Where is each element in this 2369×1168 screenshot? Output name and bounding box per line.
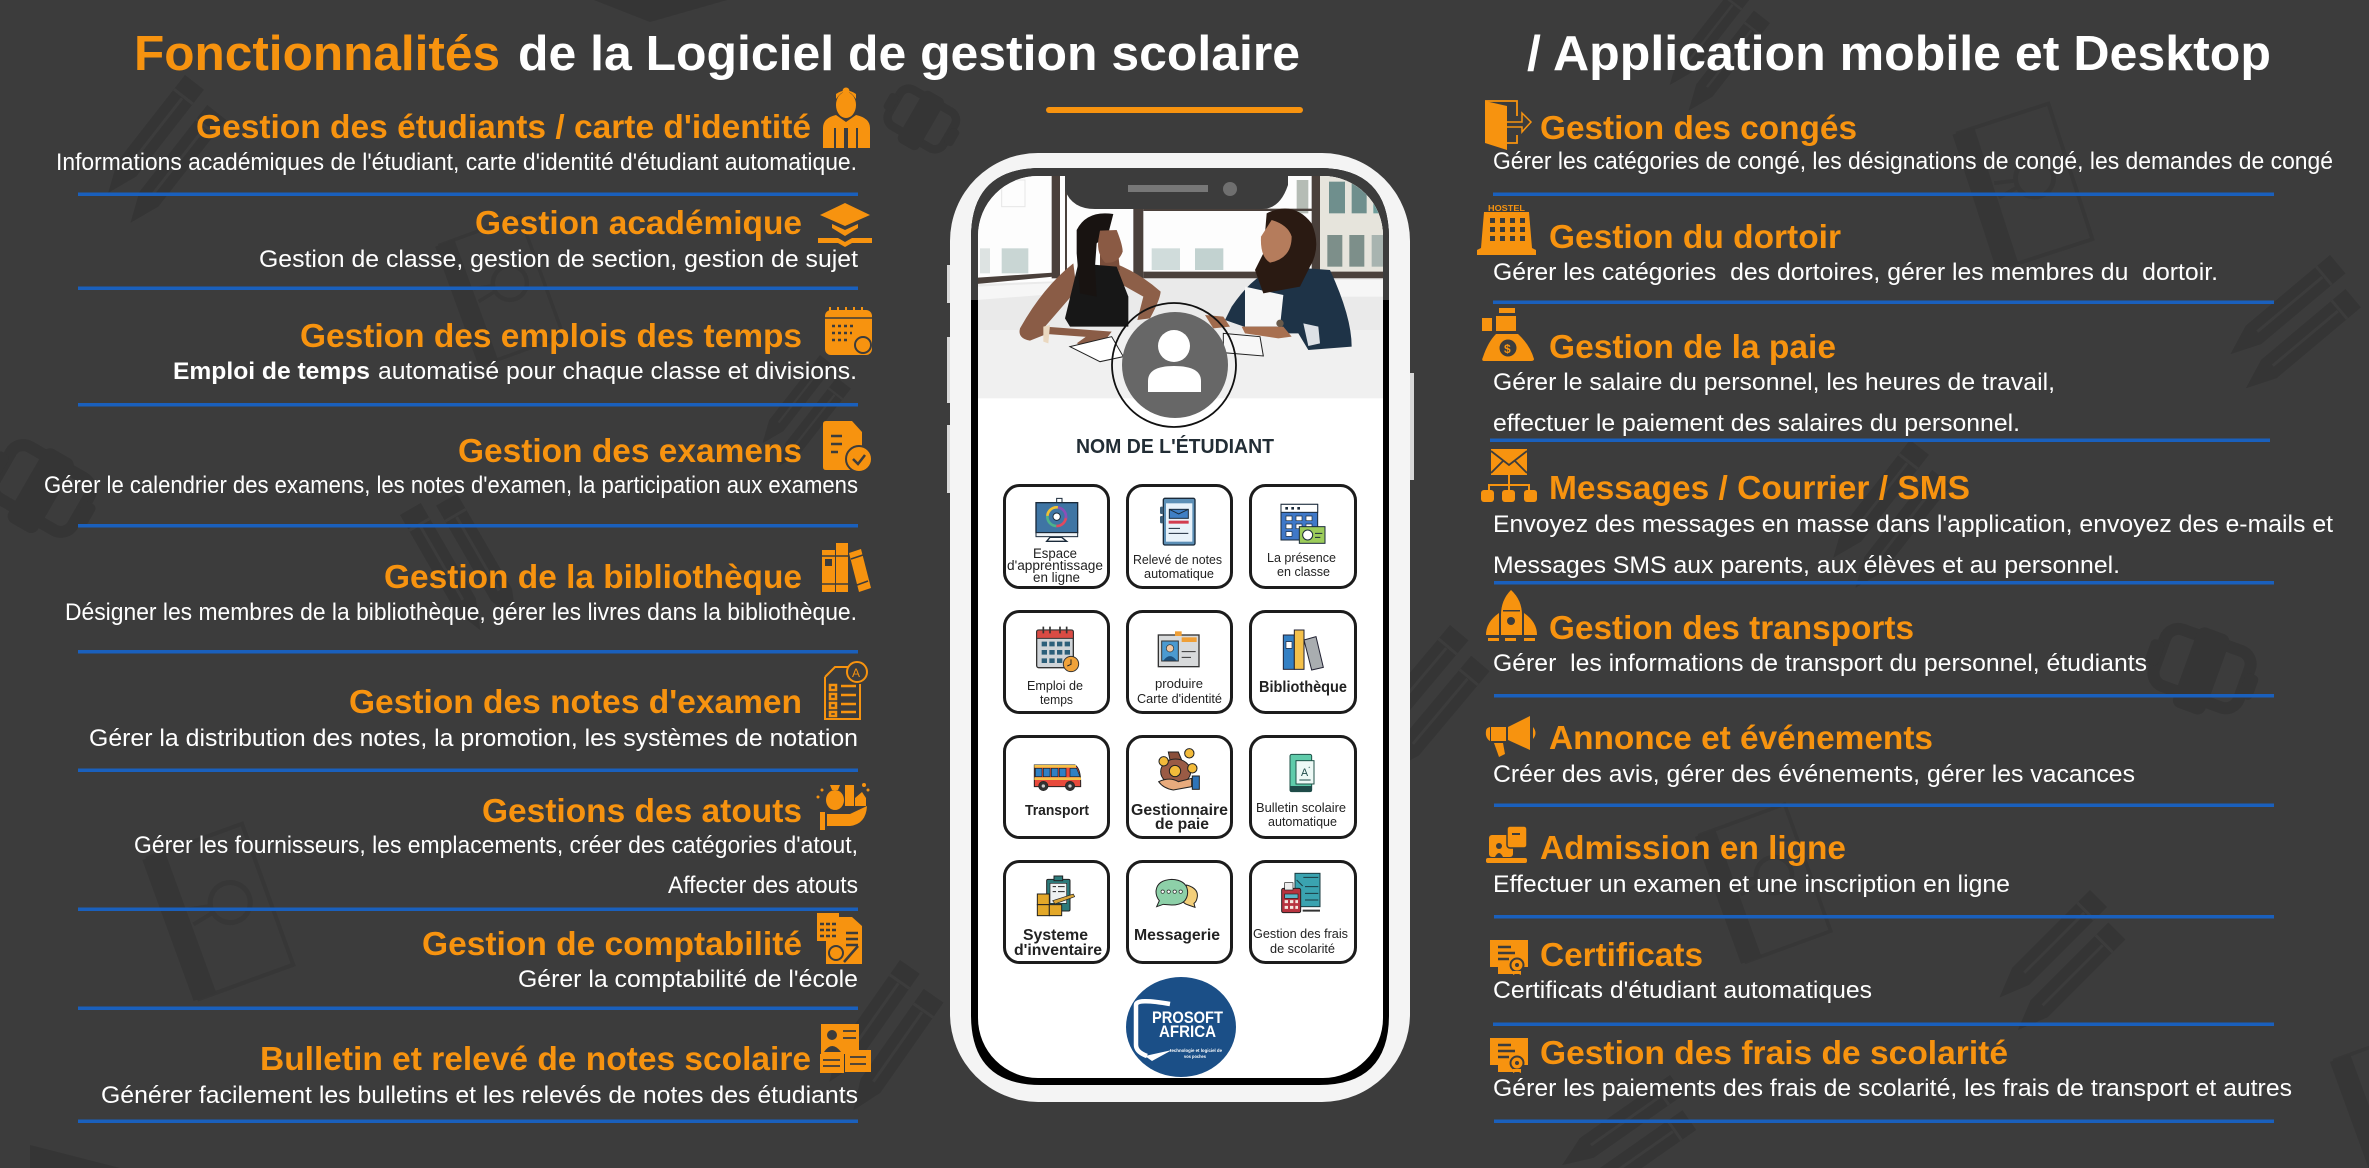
card: La présence en classe: La présence <box>1267 551 1336 565</box>
phone outer frame <box>950 153 1410 1102</box>
icon: fee documents <box>1282 873 1320 913</box>
icon: phone report card: * <box>1308 765 1310 770</box>
window frames <box>977 175 1383 284</box>
card: Bibliothèque <box>1250 612 1356 712</box>
item: Bulletin et relevé de notes scolaire: Bulletin et relevé de notes scolaire <box>260 1041 811 1078</box>
item: Gestion de comptabilité <box>78 913 862 1010</box>
icon: phone report <box>1160 498 1195 545</box>
icon: rocket <box>1486 590 1537 641</box>
icon: money bag in hand <box>1159 749 1199 790</box>
phone notch <box>1065 176 1288 209</box>
icon: hostel building <box>1477 204 1536 255</box>
card: Relevé de notes: automatique <box>1144 567 1214 581</box>
icon: bus <box>1034 765 1081 791</box>
icon: money bag: $ <box>1504 342 1511 356</box>
logo: Prosoft Africa: vos poches <box>1184 1054 1206 1059</box>
photo: two women at a table <box>977 175 1383 398</box>
phone bezel <box>971 168 1389 1085</box>
item: Gestion du dortoir: Gestion du dortoir <box>1549 219 1841 256</box>
logo: Prosoft Africa: AFRICA <box>1159 1023 1216 1041</box>
item: Gestion de comptabilité: Gérer la comptabilité de l'école <box>518 966 858 993</box>
item: Gestion des notes d'examen: Gestion des notes d'examen <box>349 684 802 721</box>
item: Gestions des atouts: Gestions des atouts <box>482 793 802 830</box>
card: Espace d'apprentissage: en ligne <box>1033 570 1080 585</box>
item: Bulletin et relevé de notes scolaire: Générer facilement les bulletins et les relevés de notes des étudiants <box>101 1082 858 1109</box>
panel: right feature list <box>1477 101 2333 1123</box>
item: Gestion académique: Gestion de classe, gestion de section, gestion de sujet <box>259 246 858 273</box>
title: main heading left <box>134 26 1300 81</box>
card: Systeme d'inventaire <box>1004 862 1108 962</box>
item: Gestion des étudiants: Informations académiques de l'étudiant, carte d'identité d'étudiant automatique. <box>56 149 857 176</box>
icon: money bag <box>1482 308 1534 361</box>
item: Gestion des étudiants <box>56 88 870 196</box>
card: Espace d'apprentissage <box>1004 486 1108 588</box>
card: Bulletin scolaire: Bulletin scolaire <box>1256 801 1346 815</box>
item: Gestion des notes d'examen: Gérer la distribution des notes, la promotion, les systèmes de notation <box>89 725 858 752</box>
card: Gestionnaire de paie: Gestionnaire <box>1131 802 1228 819</box>
item: Gestions des atouts <box>78 783 870 911</box>
item: Gestions des atouts: Affecter des atouts <box>668 872 858 899</box>
phone mockup <box>947 153 1414 1102</box>
item: Gestion de la paie: Gérer le salaire du personnel, les heures de travail, <box>1493 369 2055 396</box>
card: Gestion des frais de scolarité: de scolarité <box>1270 942 1335 956</box>
notch speaker and camera <box>1128 182 1237 196</box>
right woman <box>1205 208 1352 350</box>
icon: assets in hand <box>816 783 870 830</box>
phone top bezel <box>971 168 1389 300</box>
icon: inventory clipboard <box>1037 876 1075 916</box>
icon: graded paper: A <box>852 666 860 680</box>
item: Gestion de la paie <box>1482 308 2270 442</box>
card: Emploi de temps: Emploi de <box>1027 679 1083 693</box>
card: La présence en classe: en classe <box>1277 565 1330 579</box>
card: Systeme d'inventaire: Systeme <box>1023 927 1088 944</box>
title: main heading left: Fonctionnalités <box>134 26 500 81</box>
window scenery <box>980 175 1383 275</box>
item: Gestion des emplois des temps: automatisé pour chaque classe et divisions. <box>378 358 857 385</box>
item: Messages / Courrier / SMS: Envoyez des messages en masse dans l'application, envoyez des e-mails et <box>1493 511 2333 538</box>
card: Gestionnaire de paie: de paie <box>1155 816 1209 833</box>
item: Gestion de la paie: effectuer le paiement des salaires du personnel. <box>1493 410 2020 437</box>
item: Gestion de la bibliothèque: Gestion de la bibliothèque <box>384 559 802 596</box>
wall and table <box>977 278 1383 333</box>
item: Gestion de la paie: Gestion de la paie <box>1549 329 1836 366</box>
item: Certificats <box>1490 937 2274 1026</box>
item: Gestion des étudiants: Gestion des étudiants / carte d'identité <box>196 109 811 146</box>
icon: attendance calendar <box>1281 504 1325 543</box>
item: Gestion des transports: Gérer les informations de transport du personnel, étudiants <box>1493 650 2147 677</box>
item: Gestion académique <box>78 203 872 290</box>
card: Espace d'apprentissage: Espace <box>1033 546 1077 561</box>
item: Gestion des frais de scolarité: Gérer les paiements des frais de scolarité, les frais de transport et autres <box>1493 1075 2292 1102</box>
icon: student <box>823 88 870 148</box>
card: Bulletin scolaire: automatique <box>1268 815 1337 829</box>
item: Gestion des examens <box>44 421 872 528</box>
icon: admission laptop <box>1486 826 1527 863</box>
icon: graded paper <box>825 662 867 719</box>
icon: graduation cap on book <box>818 203 872 247</box>
card: Relevé de notes <box>1128 486 1232 588</box>
icon: certificate fees <box>1490 1038 1528 1073</box>
card: Transport <box>1004 736 1108 838</box>
logo monitor stand <box>1145 1050 1172 1061</box>
item: Gestion des emplois des temps: Emploi de temps <box>173 358 370 385</box>
title: main heading right: / Application mobile et Desktop <box>1527 26 2271 81</box>
card: Espace d'apprentissage: d'apprentissage <box>1007 558 1103 573</box>
item: Gestion du dortoir: Gérer les catégories des dortoires, gérer les membres du dortoir. <box>1493 259 2218 286</box>
icon: door exit <box>1485 101 1531 150</box>
item: Gestion des transports: Gestion des transports <box>1549 610 1914 647</box>
item: Messages / Courrier / SMS: Messages / Courrier / SMS <box>1549 470 1970 507</box>
icon: accounting <box>817 913 862 964</box>
card: La présence en classe <box>1250 486 1356 588</box>
app grid <box>1004 486 1356 962</box>
icon: report <box>820 1024 871 1073</box>
icon: books <box>1283 630 1323 670</box>
item: Certificats: Certificats d'étudiant automatiques <box>1493 977 1872 1004</box>
icon: calendar <box>825 307 872 355</box>
title: main heading left: de la Logiciel de gestion scolaire <box>518 26 1300 81</box>
icon: exam document <box>823 421 872 472</box>
item: Admission en ligne: Effectuer un examen et une inscription en ligne <box>1493 871 2010 898</box>
item: Gestion de la bibliothèque: Désigner les membres de la bibliothèque, gérer les livres dans la bibliothèque. <box>65 599 857 626</box>
card: Gestion des frais de scolarité <box>1250 862 1356 962</box>
card: Messagerie: Messagerie <box>1134 927 1220 944</box>
card: Bulletin scolaire <box>1250 736 1356 838</box>
card: produire Carte d'identité <box>1128 612 1232 712</box>
item: Gestion du dortoir <box>1477 204 2274 304</box>
item: Certificats: Certificats <box>1540 937 1703 974</box>
icon: phone report card: A <box>1301 767 1309 779</box>
card: Emploi de temps <box>1004 612 1108 712</box>
card: Emploi de temps: temps <box>1040 693 1073 707</box>
logo: Prosoft Africa <box>1126 977 1236 1077</box>
item: Gestion des congés: Gestion des congés <box>1540 110 1857 147</box>
item: Gestion des congés: Gérer les catégories de congé, les désignations de congé, les demandes de congé <box>1493 148 2333 175</box>
icon: phone report card <box>1290 754 1314 792</box>
item: Annonce et événements: Créer des avis, gérer des événements, gérer les vacances <box>1493 761 2135 788</box>
card: Systeme d'inventaire: d'inventaire <box>1014 942 1102 959</box>
card: Gestionnaire de paie <box>1128 736 1232 838</box>
logo monitor outline <box>1136 1001 1170 1056</box>
item: Annonce et événements <box>1486 716 2274 807</box>
card: produire Carte d'identité: produire <box>1155 677 1203 691</box>
item: Gestion de comptabilité: Gestion de comptabilité <box>422 926 802 963</box>
card: Gestion des frais de scolarité: Gestion des frais <box>1253 927 1348 941</box>
item: Gestion académique: Gestion académique <box>475 205 802 242</box>
item: Gestion des frais de scolarité: Gestion des frais de scolarité <box>1540 1035 2008 1072</box>
icon: megaphone <box>1486 716 1536 757</box>
icon: monitor <box>1036 498 1078 541</box>
item: Admission en ligne <box>1486 826 2274 918</box>
avatar <box>1112 303 1236 427</box>
item: Gestions des atouts: Gérer les fournisseurs, les emplacements, créer des catégories d'atout, <box>134 832 858 859</box>
card: produire Carte d'identité: Carte d'identité <box>1137 692 1222 706</box>
item: Bulletin et relevé de notes scolaire <box>78 1024 871 1123</box>
phone side buttons <box>947 265 1414 493</box>
logo: Prosoft Africa: PROSOFT <box>1152 1009 1223 1027</box>
panel: left feature list <box>44 88 872 1123</box>
icon: certificate <box>1490 940 1528 975</box>
phone screen <box>978 176 1383 1078</box>
item: Admission en ligne: Admission en ligne <box>1540 830 1846 867</box>
item: Gestion des examens: Gestion des examens <box>458 433 802 470</box>
item: Gestion de la bibliothèque <box>65 543 871 654</box>
icon: chat bubbles <box>1156 879 1197 907</box>
icon: books <box>822 543 871 592</box>
card: Transport: Transport <box>1025 803 1089 819</box>
icon: ID card <box>1158 631 1199 667</box>
card: Messagerie <box>1128 862 1232 962</box>
item: Messages / Courrier / SMS: Messages SMS aux parents, aux élèves et au personnel. <box>1493 552 2120 579</box>
icon: schedule calendar <box>1037 627 1079 672</box>
item: Messages / Courrier / SMS <box>1481 449 2333 584</box>
card: Bibliothèque: Bibliothèque <box>1259 679 1347 696</box>
item: Gestion des transports <box>1486 590 2274 698</box>
icon: hostel building: HOSTEL <box>1488 204 1525 213</box>
item: Gestion des emplois des temps: Gestion des emplois des temps <box>300 318 802 355</box>
card: Relevé de notes: Relevé de notes <box>1133 553 1222 567</box>
icon: mail network <box>1481 449 1537 502</box>
student name: NOM DE L'ÉTUDIANT <box>1076 435 1274 458</box>
papers <box>1070 337 1123 362</box>
item: Gestion des frais de scolarité <box>1490 1035 2292 1123</box>
orange accent bar <box>1046 107 1303 113</box>
logo: Prosoft Africa: technologie et logiciel de <box>1170 1048 1222 1053</box>
item: Gestion des congés <box>1485 101 2333 196</box>
item: Gestion des examens: Gérer le calendrier des examens, les notes d'examen, la participation aux examens <box>44 472 858 499</box>
item: Gestion des notes d'examen <box>78 662 867 772</box>
item: Annonce et événements: Annonce et événements <box>1549 720 1933 757</box>
left woman <box>1020 213 1161 350</box>
item: Gestion des emplois des temps <box>78 307 872 406</box>
